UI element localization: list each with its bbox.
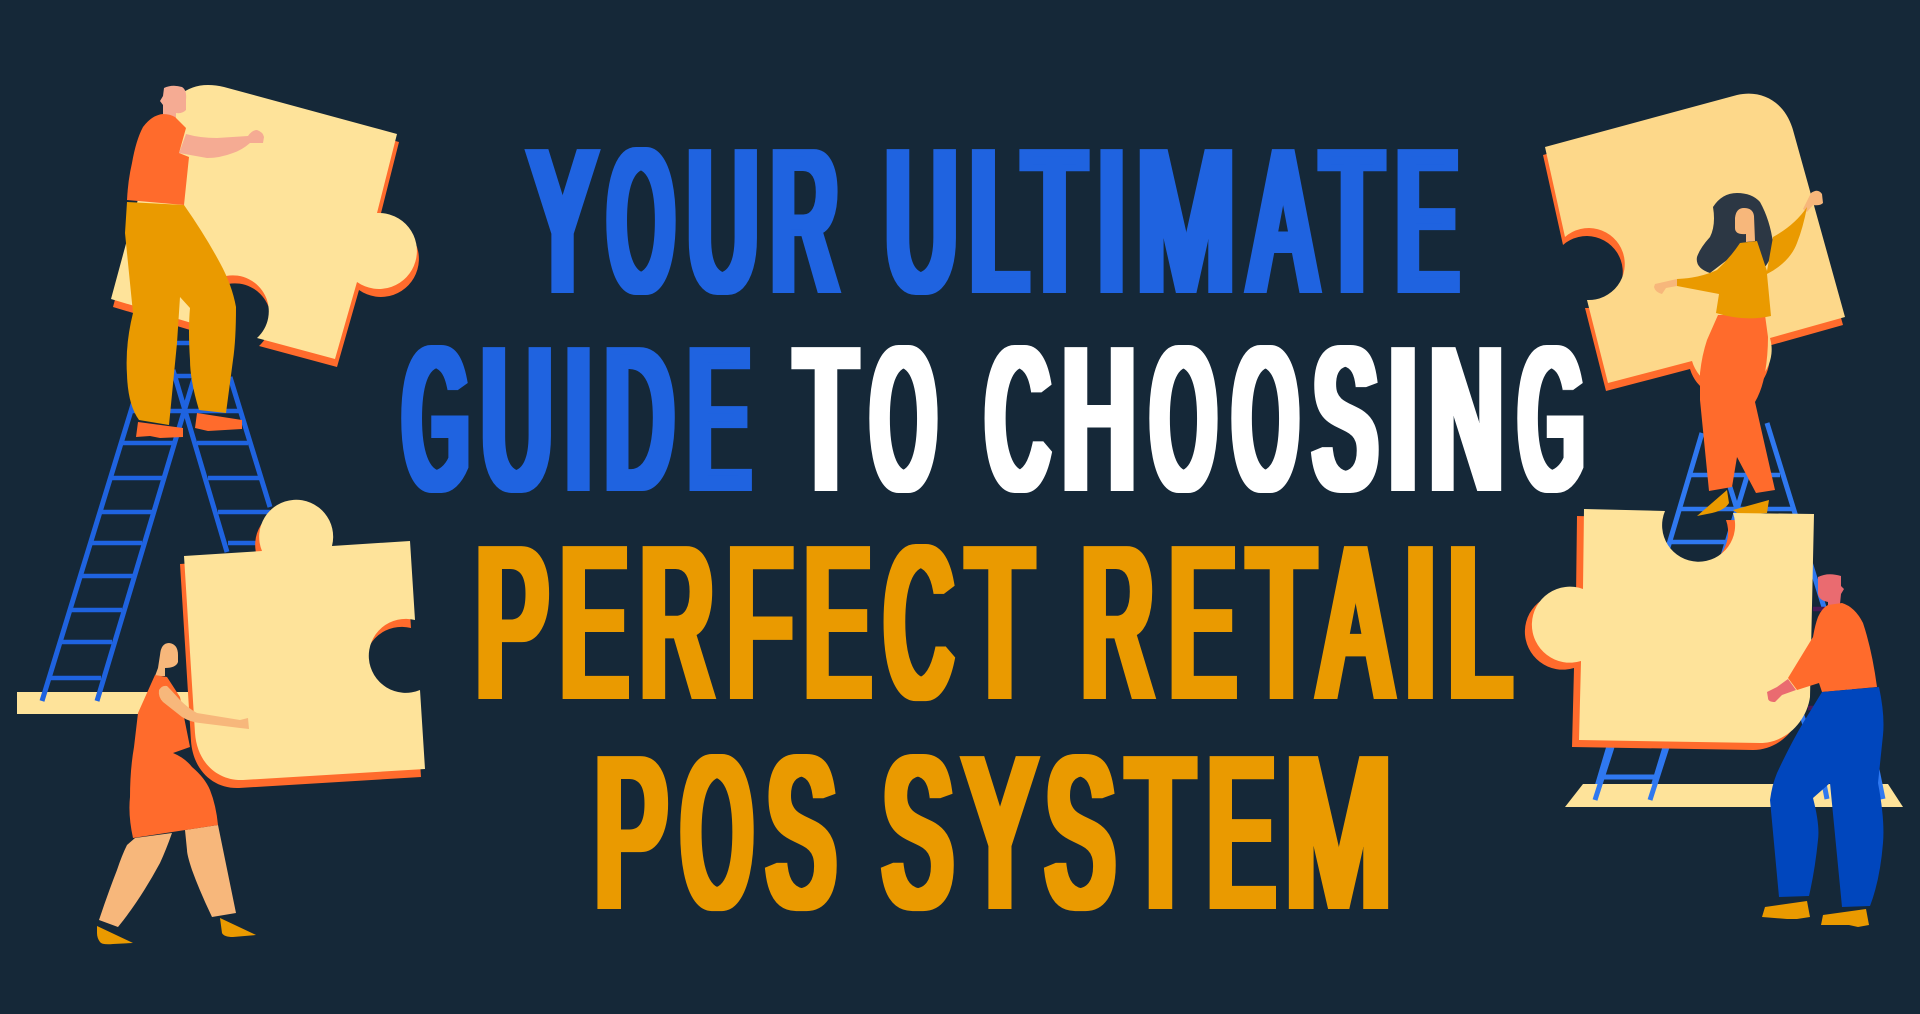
title line 3: T bbox=[1249, 504, 1314, 741]
title line 2: I bbox=[565, 307, 592, 530]
title line 1: A bbox=[1251, 109, 1315, 332]
title line 3: R bbox=[1082, 504, 1153, 741]
figure: woman on ladder bbox=[1654, 191, 1823, 516]
title line 2: O bbox=[872, 307, 935, 530]
head bbox=[160, 86, 186, 118]
hand bbox=[1767, 679, 1796, 702]
text: G bbox=[1520, 307, 1583, 530]
shirt bbox=[127, 114, 189, 205]
trousers bbox=[125, 202, 236, 425]
arm bbox=[179, 130, 264, 158]
title line 3: A bbox=[1321, 504, 1391, 741]
title line 2: G bbox=[404, 307, 468, 530]
title line 3: P bbox=[476, 504, 548, 741]
platform: right bbox=[1565, 784, 1903, 807]
puzzle piece: bottom right bbox=[1525, 509, 1814, 750]
sweater bbox=[1788, 603, 1877, 692]
title line 2: E bbox=[689, 307, 749, 530]
title bbox=[404, 109, 1583, 951]
title line 4: Y bbox=[965, 714, 1035, 951]
title line 1: U bbox=[688, 109, 758, 332]
title line 3: F bbox=[728, 504, 791, 741]
title line 4: P bbox=[595, 714, 667, 951]
title line 3 bbox=[476, 504, 1510, 741]
title line 3: C bbox=[885, 504, 952, 741]
title line 2: S bbox=[1314, 307, 1376, 530]
title line 1: Y bbox=[530, 109, 595, 332]
title line 2: T bbox=[796, 307, 856, 530]
shoes bbox=[1762, 901, 1869, 927]
title line 1: U bbox=[886, 109, 957, 332]
arm bbox=[159, 686, 249, 729]
title line 4: S bbox=[1046, 714, 1114, 951]
sweater bbox=[1677, 207, 1807, 318]
title line 1: I bbox=[1098, 109, 1125, 332]
face and neck bbox=[1735, 208, 1755, 242]
title: M bbox=[1286, 714, 1392, 951]
title: L bbox=[1449, 504, 1510, 741]
title line 3: R bbox=[641, 504, 713, 741]
hands bbox=[1654, 191, 1823, 294]
title line 1: T bbox=[1322, 109, 1382, 332]
hair bbox=[1697, 193, 1773, 273]
platform: left bbox=[17, 692, 197, 714]
dress bbox=[129, 675, 218, 838]
title line 2: U bbox=[482, 307, 552, 530]
head bbox=[1818, 574, 1844, 606]
title line 3: E bbox=[561, 504, 627, 741]
title line 2: H bbox=[1063, 307, 1135, 530]
title line 3: I bbox=[1404, 504, 1437, 741]
title line 1: R bbox=[772, 109, 838, 332]
title line 2: O bbox=[1234, 307, 1297, 530]
title line 1: T bbox=[1024, 109, 1085, 332]
trousers bbox=[1770, 687, 1884, 907]
title line 4: S bbox=[767, 714, 835, 951]
title line 1: L bbox=[970, 109, 1027, 332]
head bbox=[155, 643, 178, 676]
title line 4 bbox=[595, 714, 1392, 951]
trousers bbox=[1700, 315, 1775, 493]
title line 2: C bbox=[987, 307, 1048, 530]
title line 3: T bbox=[968, 504, 1032, 741]
title line 1: M bbox=[1137, 109, 1235, 332]
title line 3: E bbox=[805, 504, 870, 741]
title line 2: O bbox=[1152, 307, 1215, 530]
figure: man on ladder bbox=[125, 86, 264, 438]
shoes bbox=[97, 918, 256, 944]
title: E bbox=[1397, 109, 1457, 332]
puzzle piece: top right bbox=[1543, 94, 1845, 398]
ladder: left bbox=[42, 300, 270, 701]
title line 2 bbox=[404, 307, 1583, 530]
title line 4: E bbox=[1208, 714, 1274, 951]
title line 2: D bbox=[606, 307, 673, 530]
title line 1: O bbox=[609, 109, 673, 332]
legs bbox=[99, 825, 236, 927]
puzzle piece: bottom left bbox=[180, 500, 425, 788]
ladder: right bbox=[1593, 423, 1883, 800]
title line 4: T bbox=[1128, 714, 1193, 951]
title line 4: O bbox=[683, 714, 752, 951]
title line 2: I bbox=[1388, 307, 1418, 530]
ladder feet: right bbox=[1595, 747, 1883, 800]
title line 4: S bbox=[883, 714, 952, 951]
figure: woman pushing bbox=[97, 643, 256, 944]
puzzle piece: top left bbox=[111, 85, 419, 367]
figure: man pushing bbox=[1762, 574, 1884, 927]
shoes bbox=[136, 413, 242, 438]
title line 2: N bbox=[1430, 307, 1503, 530]
shoes bbox=[1697, 490, 1769, 516]
title line 1 bbox=[530, 109, 1457, 332]
title line 3: E bbox=[1170, 504, 1235, 741]
